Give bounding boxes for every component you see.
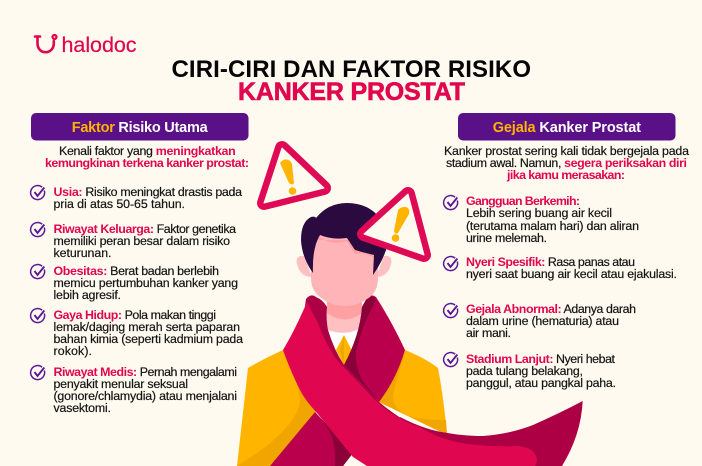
intro text (45, 144, 249, 170)
icon: check (31, 366, 45, 380)
item: gejala abnormal: air mani. (466, 326, 511, 340)
icon: check (31, 265, 45, 279)
item: nyeri spesifik: Nyeri Spesifik: Rasa panas atau (466, 255, 635, 269)
scarf lower band (270, 412, 353, 466)
item: riwayat keluarga (31, 222, 236, 260)
item: stadium lanjut: pada tulang belakang, (466, 364, 583, 378)
icon: warning triangle left (264, 148, 324, 203)
head (297, 203, 391, 306)
ears (297, 256, 312, 277)
item: stadium lanjut: Stadium Lanjut: Nyeri hebat (466, 352, 616, 366)
jacket right (379, 350, 447, 435)
icon: check (444, 196, 458, 210)
item: stadium lanjut (444, 352, 616, 390)
icon: check (444, 304, 458, 318)
icon: stethoscope (35, 35, 56, 52)
item: nyeri spesifik: nyeri saat buang air kecil atau ejakulasi. (466, 267, 677, 281)
item: gaya hidup (31, 308, 243, 358)
item: riwayat keluarga: memiliki peran besar dalam risiko (54, 234, 230, 248)
item: obesitas: lebih agresif. (54, 288, 121, 302)
item: gaya hidup: bahan kimia (seperti kadmium pada (54, 332, 243, 346)
heading: gejala kanker prostat: Gejala Kanker Prostat (493, 120, 641, 136)
face (311, 232, 378, 306)
heading: gejala kanker prostat (458, 113, 676, 140)
intro text: kemungkinan terkena kanker prostat: (45, 156, 249, 170)
title: CIRI-CIRI DAN FAKTOR RISIKO (172, 56, 531, 83)
item: riwayat medis: Riwayat Medis: Pernah mengalami (54, 365, 237, 379)
icon: check (31, 186, 45, 200)
intro text: Kanker prostat sering kali tidak bergejala pada (444, 144, 689, 158)
item: nyeri spesifik (444, 255, 677, 281)
item: obesitas (31, 264, 238, 302)
ribbon tail (400, 401, 583, 466)
item: usia: pria di atas 50-65 tahun. (54, 197, 185, 211)
item: obesitas: Obesitas: Berat badan berlebih (54, 264, 219, 278)
illustration: man with ribbon (237, 203, 583, 466)
logo: halodoc: halodoc (62, 33, 137, 57)
heading: faktor risiko utama: Faktor Risiko Utama (72, 120, 209, 136)
tie (336, 335, 352, 366)
icon: warning triangle right (364, 194, 424, 255)
heading: faktor risiko utama (31, 113, 248, 140)
intro text: jika kamu merasakan: (506, 168, 625, 182)
icon: check (444, 257, 458, 271)
title: KANKER PROSTAT (238, 78, 465, 106)
icon: check (31, 223, 45, 237)
ribbon main (283, 302, 537, 466)
hair (301, 203, 386, 275)
ribbon dark edge (303, 295, 517, 450)
item: riwayat medis: vasektomi. (54, 401, 111, 415)
neck (327, 296, 362, 345)
item: gejala abnormal (444, 302, 636, 340)
item: usia: Usia: Risiko meningkat drastis pada (54, 185, 242, 199)
item: riwayat medis (31, 365, 237, 415)
hair shadow (316, 237, 374, 258)
panel: faktor risiko (31, 113, 249, 415)
item: usia (31, 185, 242, 211)
item: gaya hidup: rokok). (54, 344, 92, 358)
panel: gejala (444, 113, 689, 390)
item: gangguan berkemih: urine melemah. (466, 231, 547, 245)
item: gangguan berkemih: Lebih sering buang air kecil (466, 206, 612, 220)
intro text (444, 144, 689, 182)
icon: check (31, 309, 45, 323)
item: gaya hidup: lemak/daging merah serta paparan (54, 320, 240, 334)
item: gangguan berkemih (444, 194, 639, 245)
item: riwayat medis: penyakit menular seksual (54, 377, 188, 391)
title (172, 56, 531, 106)
intro text: Kenali faktor yang meningkatkan (59, 144, 236, 158)
item: riwayat medis: (gonore/chlamydia) atau menjalani (54, 389, 237, 403)
item: obesitas: memicu pertumbuhan kanker yang (54, 276, 238, 290)
item: gangguan berkemih: Gangguan Berkemih: (466, 194, 580, 208)
item: gaya hidup: Gaya Hidup: Pola makan tinggi (54, 308, 216, 322)
scarf right band (344, 295, 405, 402)
item: gejala abnormal: dalam urine (hematuria) atau (466, 314, 619, 328)
jacket left (237, 350, 316, 466)
item: riwayat keluarga: Riwayat Keluarga: Faktor genetika (54, 222, 236, 236)
icon: check (444, 353, 458, 367)
shirt (328, 329, 359, 366)
intro text: stadium awal. Namun, segera periksakan diri (446, 156, 687, 170)
item: gangguan berkemih: (terutama malam hari) dan aliran (466, 219, 639, 233)
item: riwayat keluarga: keturunan. (54, 246, 112, 260)
item: stadium lanjut: panggul, atau pangkal paha. (466, 376, 616, 390)
item: gejala abnormal: Gejala Abnormal: Adanya darah (466, 302, 636, 316)
